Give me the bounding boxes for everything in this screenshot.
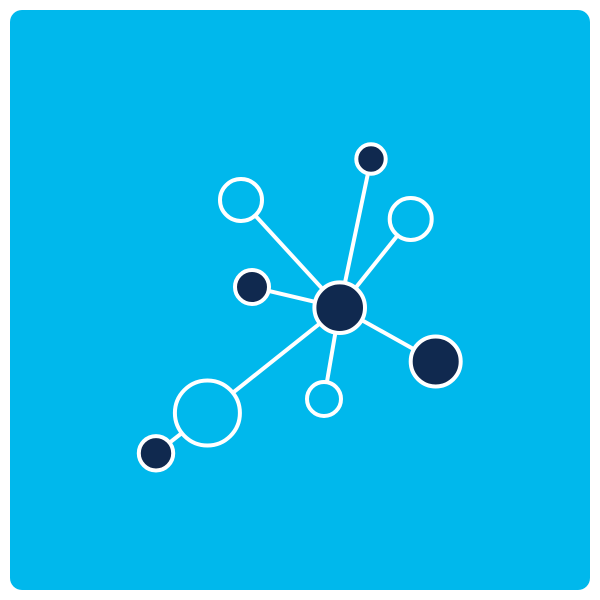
node: lower left large hollow	[175, 380, 240, 446]
node: upper left hollow	[220, 179, 262, 221]
node: upper right hollow	[390, 198, 432, 240]
node: top small dark	[356, 144, 386, 174]
node: left dark	[235, 270, 269, 304]
node: lower left small dark	[139, 436, 173, 470]
node: central hub dark	[314, 282, 365, 333]
network connections	[156, 159, 436, 453]
node: bottom hollow	[307, 382, 341, 416]
node: right large dark	[411, 336, 461, 386]
